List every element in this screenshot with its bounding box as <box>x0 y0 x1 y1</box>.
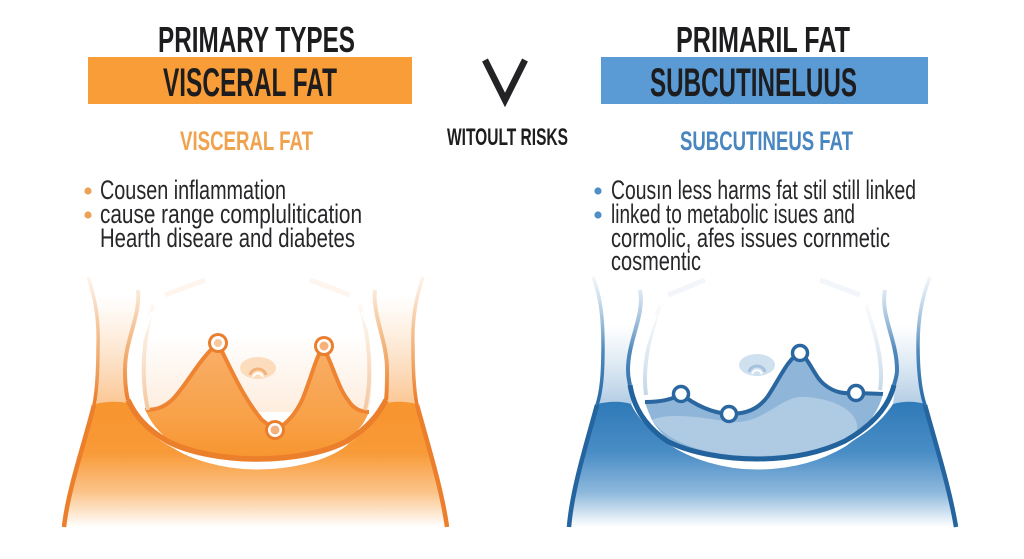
bullet list: subcutaneous fat: linked to metabolic isues and <box>611 199 855 229</box>
torso side shading <box>598 320 925 404</box>
fat contour line <box>645 353 884 414</box>
subcutaneous fat shape <box>645 353 883 458</box>
panel: visceral fat header and text <box>84 19 412 253</box>
fat contour line <box>145 343 369 430</box>
visceral fat shape <box>145 343 369 459</box>
torso side shading <box>92 295 420 404</box>
torso outline <box>569 277 956 527</box>
icon: navel <box>739 354 775 376</box>
versus mark <box>447 60 568 151</box>
bullet list: subcutaneous fat: cosmentic <box>611 246 701 276</box>
data markers <box>208 333 334 440</box>
icon: navel <box>240 357 276 379</box>
abdomen bowl <box>136 312 380 468</box>
subheading: visceral fat: VISCERAL FAT <box>180 126 313 156</box>
panel: subcutaneous fat header and text <box>594 19 928 276</box>
inner fat layer <box>652 397 857 456</box>
label: without risks: WITOULT RISKS <box>447 124 568 151</box>
bullet list: subcutaneous fat <box>594 175 916 276</box>
illustration: subcutaneous fat torso <box>568 277 956 527</box>
data markers <box>674 346 864 422</box>
banner: subcutineluus: SUBCUTINELUUS <box>650 61 857 105</box>
subheading: subcutineus fat: SUBCUTINEUS FAT <box>680 126 853 156</box>
belly interior shade <box>144 340 372 412</box>
torso fat mass <box>63 402 447 527</box>
bullet list: subcutaneous fat: cormolic, afes issues cornmetic <box>611 223 890 253</box>
banner: subcutineluus <box>601 57 928 105</box>
icon: V <box>485 60 525 100</box>
bowl contour <box>628 290 897 468</box>
banner: visceral fat <box>88 57 412 105</box>
faint chest marks <box>668 280 860 295</box>
faint chest marks <box>165 280 350 295</box>
bullet list: visceral fat: cause range complulitication <box>100 199 362 229</box>
illustration: visceral fat torso <box>63 277 447 527</box>
banner: visceral fat: VISCERAL FAT <box>163 61 337 105</box>
heading: primary types: PRIMARY TYPES <box>158 19 355 60</box>
bullet list: visceral fat: Hearth diseare and diabetes <box>100 223 355 253</box>
bullet list: visceral fat: Cousen inflammation <box>100 175 286 205</box>
torso outline <box>64 277 447 527</box>
torso fat mass <box>568 402 956 527</box>
heading: primaril fat: PRIMARIL FAT <box>676 19 850 60</box>
bowl contour <box>125 290 387 468</box>
abdomen bowl <box>640 315 886 468</box>
bullet list: visceral fat <box>84 175 362 253</box>
